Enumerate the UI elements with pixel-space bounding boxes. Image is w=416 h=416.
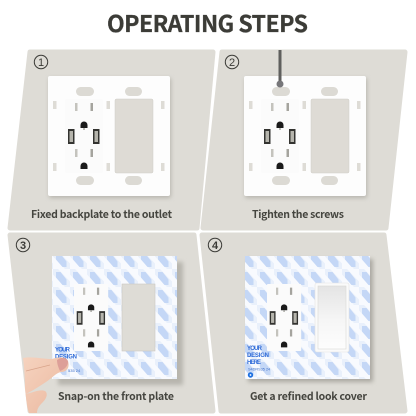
illustration: backplate with screwdriver (244, 76, 367, 198)
illustration: front plate: YOUR (55, 348, 71, 354)
panel: step 2 (203, 50, 405, 228)
illustration: front plate: DESIGN (55, 354, 77, 360)
icon: step number 4: 4 (212, 240, 219, 252)
icon: step number 2 (225, 55, 239, 69)
illustration: front plate (52, 256, 183, 385)
illustration: finished cover: HERE (247, 360, 261, 366)
icon: step number 1 (34, 55, 48, 69)
icon: step number 3: 3 (20, 240, 26, 252)
switch (315, 283, 349, 352)
illustration: finished cover: S4DRS35 24 (248, 368, 270, 372)
caption: step 3: Snap-on the front plate (58, 389, 174, 404)
icon: hand holding plate (23, 357, 69, 413)
panel: step 1 (10, 52, 213, 228)
illustration: finished cover: DESIGN (247, 353, 269, 359)
icon: step number 2: 2 (229, 57, 235, 69)
icon: screwdriver (276, 50, 284, 88)
illustration: finished cover (245, 256, 373, 382)
icon: step number 3 (16, 238, 30, 252)
icon: step number 1: 1 (38, 57, 44, 69)
caption: step 1: Fixed backplate to the outlet (31, 207, 173, 222)
icon: step number 4 (208, 238, 222, 252)
caption: step 4: Get a refined look cover (250, 389, 367, 404)
caption: step 2: Tighten the screws (252, 207, 344, 222)
panel: step 3 (10, 235, 213, 413)
title: OPERATING STEPS (107, 5, 308, 39)
panel: step 4 (202, 235, 405, 411)
illustration: finished cover: YOUR (247, 346, 263, 352)
illustration: backplate on outlet (48, 76, 171, 198)
illustration: front plate: 535 24 (68, 368, 81, 373)
